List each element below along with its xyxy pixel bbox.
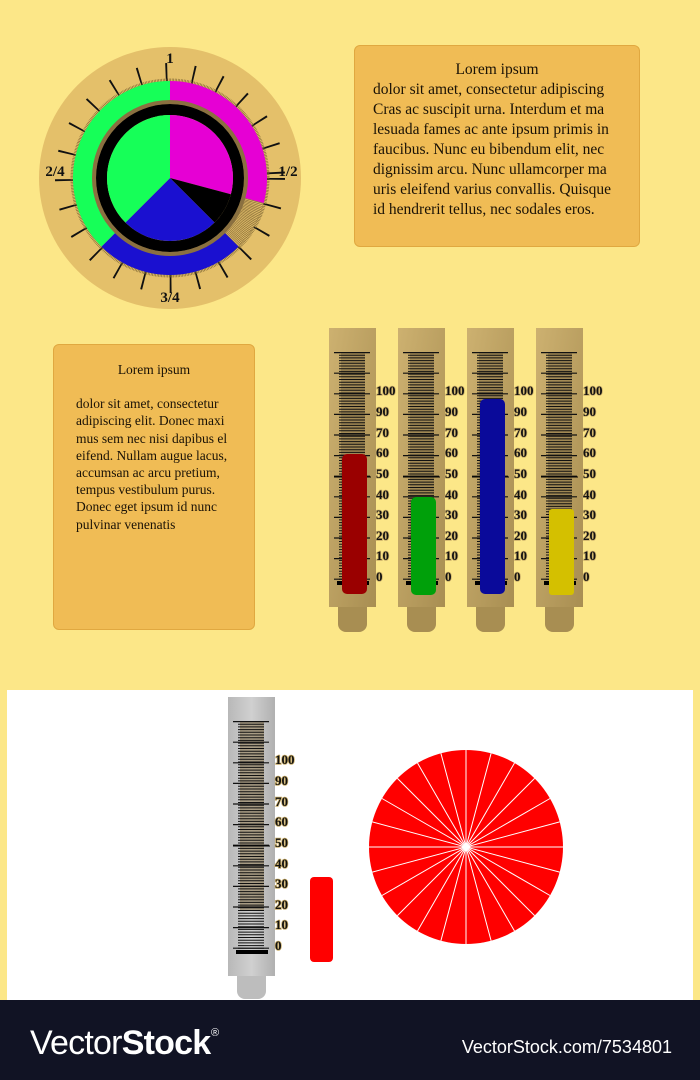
text box 2: Donec eget ipsum id nunc <box>76 499 217 514</box>
text box 2: tempus vestibulum purus. <box>76 482 215 497</box>
thermometer red <box>329 328 396 632</box>
red cylinder <box>310 877 333 962</box>
text box 2: adipiscing elit. Donec maxi <box>76 413 224 428</box>
text box 2: eifend. Nullam augue lacus, <box>76 448 227 463</box>
text box 1: Cras ac suscipit urna. Interdum et ma <box>373 101 604 118</box>
gauge: 1/2 <box>278 164 298 180</box>
text box 1 <box>354 45 640 247</box>
gauge: 2/4 <box>45 164 65 180</box>
text box 2: dolor sit amet, consectetur <box>76 396 218 411</box>
text box 2 <box>53 344 255 630</box>
thermometer yellow <box>536 328 602 632</box>
footer: VectorStock <box>30 1024 211 1062</box>
white panel <box>7 690 693 1000</box>
text box 2: mus sem nec nisi dapibus el <box>76 431 227 446</box>
text box 2: pulvinar venenatis <box>76 517 175 532</box>
text box 1: dignissim arcu. Nunc ullamcorper ma <box>373 161 607 178</box>
thermometer blue <box>467 328 534 632</box>
footer: VectorStock.com/7534801 <box>462 1037 672 1057</box>
text box 1: dolor sit amet, consectetur adipiscing <box>373 81 604 98</box>
gauge: 3/4 <box>160 290 180 306</box>
text box 2: Lorem ipsum <box>118 362 190 377</box>
text box 1: lesuada fames ac ante ipsum primis in <box>373 121 609 138</box>
footer: ® <box>211 1027 219 1039</box>
text box 1: Lorem ipsum <box>455 61 539 78</box>
gauge: 1 <box>166 51 174 67</box>
thermometer green <box>398 328 464 632</box>
text box 1: faucibus. Nunc eu bibendum elit, nec <box>373 141 604 158</box>
text box 1: id hendrerit tellus, nec sodales eros. <box>373 201 595 218</box>
text box 2: accumsan ac arcu pretium, <box>76 465 220 480</box>
text box 1: uris eleifend varius convallis. Quisque <box>373 181 611 198</box>
thermometer gray <box>228 697 294 999</box>
footer <box>0 1000 700 1080</box>
gauge <box>39 47 301 309</box>
red pie circle <box>369 750 563 944</box>
